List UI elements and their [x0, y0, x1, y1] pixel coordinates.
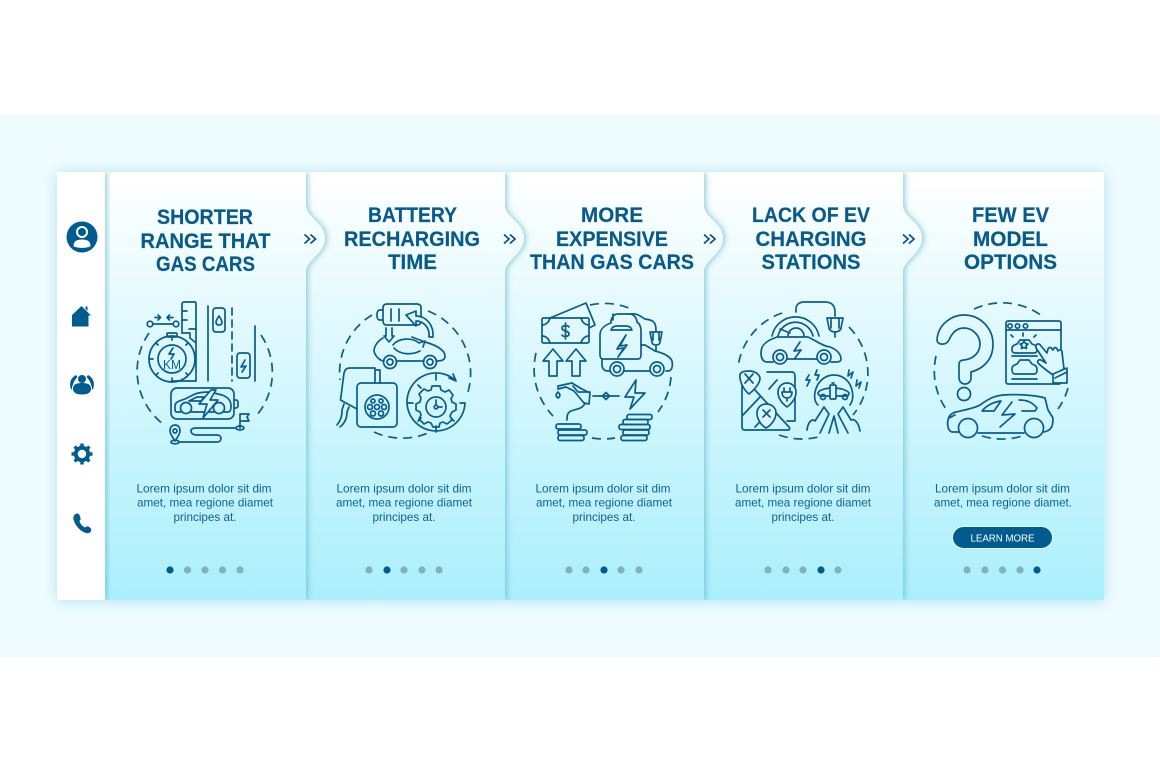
- illustration: km gauge, road, battery car and route: KM: [163, 358, 181, 372]
- body text: principes at.: [772, 511, 834, 524]
- panel background: [100, 172, 325, 600]
- heading: [530, 204, 694, 274]
- heading: [752, 204, 870, 274]
- panel: lack of EV charging stations: [680, 172, 922, 600]
- illustration: km gauge, road, battery car and route: [137, 302, 272, 444]
- illustration: money, electric van, fuel and coins: [534, 303, 672, 440]
- heading: MORE: [581, 204, 643, 227]
- body text: Lorem ipsum dolor sit dim: [336, 483, 472, 496]
- sidebar background: [57, 172, 105, 600]
- illustration: battery swap, charger and timer gear: [337, 304, 471, 438]
- body text: [735, 483, 872, 524]
- body text: Lorem ipsum dolor sit dim: [935, 483, 1070, 496]
- body text: Lorem ipsum dolor sit dim: [136, 483, 272, 496]
- pagination dots: [166, 566, 244, 574]
- body text: [934, 483, 1072, 510]
- body text: [536, 483, 673, 524]
- body text: amet, mea regione diamet: [137, 497, 274, 510]
- arrow: next: [504, 234, 515, 244]
- panel: few EV model options: [880, 172, 1104, 600]
- heading: CHARGING: [756, 228, 866, 251]
- body text: amet, mea regione diamet: [336, 497, 473, 510]
- illustration: EV, map with pins, stressed driver: [738, 302, 868, 439]
- icon: people: [70, 375, 94, 394]
- icon: settings gear: [72, 444, 92, 464]
- heading: GAS CARS: [156, 253, 255, 276]
- heading: TIME: [388, 251, 437, 274]
- panel background: [480, 172, 723, 600]
- pagination dots: [764, 566, 842, 574]
- button: learn more: LEARN MORE: [970, 532, 1034, 544]
- body text: principes at.: [572, 511, 636, 524]
- heading: THAN GAS CARS: [530, 251, 694, 274]
- heading: LACK OF EV: [752, 204, 870, 227]
- pagination dots: [565, 566, 643, 574]
- body text: Lorem ipsum dolor sit dim: [736, 483, 870, 496]
- heading: [140, 206, 271, 276]
- heading: RANGE THAT: [140, 230, 271, 253]
- body text: amet, mea regione diamet.: [934, 497, 1072, 510]
- arrow: next: [903, 234, 914, 244]
- panel background: [680, 172, 922, 600]
- icon: phone: [73, 513, 91, 533]
- heading: STATIONS: [762, 251, 860, 274]
- illustration: question mark, car catalogue and EV: [934, 303, 1068, 439]
- panel background: [880, 172, 1104, 600]
- body text: amet, mea regione diamet: [735, 497, 872, 510]
- heading: RECHARGING: [344, 228, 480, 251]
- pagination dots: [365, 566, 443, 574]
- body text: amet, mea regione diamet: [536, 497, 673, 510]
- panel: battery recharging time: [280, 172, 524, 600]
- arrow: next: [704, 234, 715, 244]
- heading: MODEL: [973, 228, 1048, 251]
- navigation sidebar: [57, 172, 105, 600]
- panel background: [280, 172, 524, 600]
- infographic: EV drawbacks onboarding screens: [0, 115, 1160, 657]
- pagination dots: [963, 566, 1041, 574]
- heading: BATTERY: [368, 204, 457, 227]
- body text: principes at.: [174, 511, 236, 524]
- arrow: next: [304, 234, 316, 244]
- heading: EXPENSIVE: [556, 228, 668, 251]
- panel: shorter range than gas cars: [100, 172, 325, 600]
- button: learn more: [952, 526, 1052, 548]
- onboarding frame shadow: [57, 172, 1104, 600]
- body text: Lorem ipsum dolor sit dim: [536, 483, 670, 496]
- heading: [964, 204, 1057, 274]
- icon: user profile: [66, 222, 98, 252]
- heading: OPTIONS: [964, 251, 1057, 274]
- icon: home: [72, 306, 91, 326]
- heading: FEW EV: [972, 204, 1049, 227]
- body text: [336, 483, 473, 524]
- body text: principes at.: [372, 511, 436, 524]
- body text: [136, 483, 274, 524]
- heading: [344, 204, 480, 274]
- panel: more expensive than gas cars: [480, 172, 723, 600]
- heading: SHORTER: [157, 206, 253, 229]
- background band: [0, 115, 1160, 657]
